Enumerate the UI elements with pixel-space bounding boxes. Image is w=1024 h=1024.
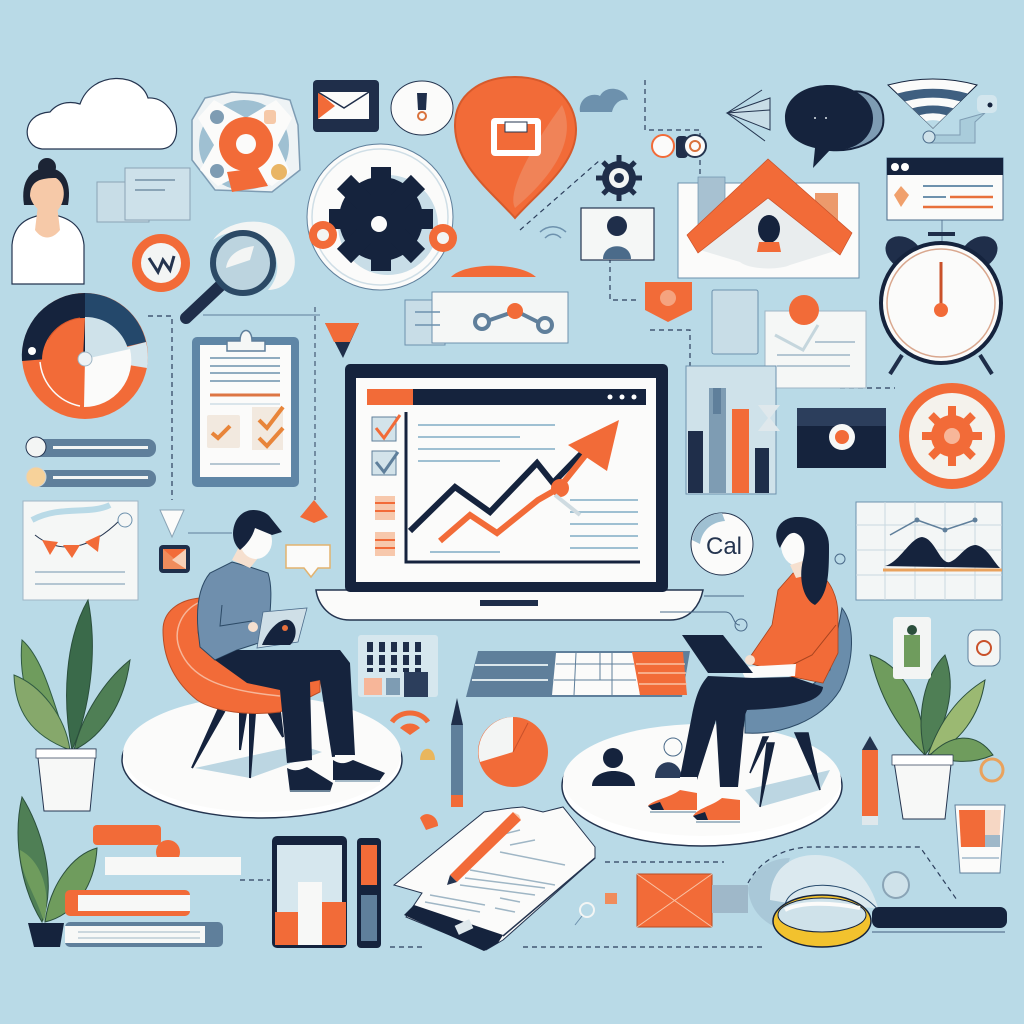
connector with ring [660, 554, 845, 631]
alarm clock [879, 229, 1004, 374]
bar chart right [686, 366, 780, 494]
sweater [750, 573, 838, 683]
laptop central [316, 364, 703, 620]
house card [678, 159, 859, 278]
browser window top right [887, 158, 1003, 247]
chair [745, 608, 852, 807]
up arrow marker [300, 500, 328, 523]
pencil [451, 698, 463, 807]
orange round badge [132, 234, 190, 292]
floor disc [562, 724, 842, 846]
chain links icon [652, 135, 706, 158]
socks and shoes [648, 777, 740, 822]
document pin [765, 295, 866, 388]
bunting card [23, 501, 138, 600]
keypad chart [358, 635, 438, 697]
tablet chart [272, 836, 381, 948]
message card [97, 168, 190, 222]
wifi small [540, 227, 566, 238]
envelope tile [313, 80, 379, 132]
person icons [592, 738, 682, 786]
plant left [14, 600, 130, 811]
speech tag [286, 545, 330, 577]
cloud [27, 78, 177, 149]
torso [198, 562, 271, 660]
video call card [581, 208, 654, 260]
legs [215, 650, 355, 763]
down arrow marker [160, 510, 232, 537]
laptop on lap [248, 608, 307, 648]
plant right [870, 655, 993, 819]
magnifying glass [186, 222, 295, 318]
pipeline card [405, 292, 568, 345]
Cal badge [691, 513, 753, 575]
small round icon [391, 81, 453, 135]
document with pen [394, 807, 595, 951]
wifi [888, 79, 997, 143]
magnifier lower right [712, 855, 1007, 947]
laptop [682, 635, 796, 678]
pie [478, 717, 548, 787]
device tile [893, 617, 1000, 679]
location tag [645, 282, 692, 322]
small gear [596, 155, 642, 201]
mail tile small [159, 545, 190, 573]
triangle marker [325, 323, 359, 358]
book stack [65, 825, 241, 947]
paper plane [727, 90, 770, 141]
chart dome [451, 266, 536, 277]
floor disc [122, 696, 402, 818]
clipboard [192, 330, 299, 487]
legs [680, 676, 823, 787]
orange pencil [862, 736, 878, 825]
central gear [307, 144, 457, 290]
plant lower left [18, 797, 97, 947]
woman avatar [12, 158, 84, 284]
location pin [455, 77, 576, 218]
slider pills [26, 437, 156, 487]
chair [163, 598, 320, 778]
orange gear badge [904, 388, 1000, 484]
donut chart [22, 293, 148, 419]
socks and shoes [287, 755, 385, 792]
data grid [466, 651, 690, 697]
glass [955, 805, 1005, 873]
connector lines [148, 80, 957, 947]
small orange ring [981, 759, 1003, 781]
head [232, 510, 282, 568]
mountain chart card [856, 502, 1002, 600]
head and hair [776, 517, 829, 605]
small cloud icon [580, 89, 628, 112]
small wifi and bell [392, 713, 438, 830]
woman on chair [562, 517, 852, 846]
man on chair [122, 510, 402, 818]
panel [712, 290, 758, 354]
speech bubbles [785, 85, 883, 168]
dark video tile [797, 408, 886, 468]
Cal badge: Cal [706, 533, 742, 560]
gear badge top left [192, 92, 300, 192]
small icons beside envelope [575, 893, 617, 925]
orange envelope [637, 874, 712, 927]
